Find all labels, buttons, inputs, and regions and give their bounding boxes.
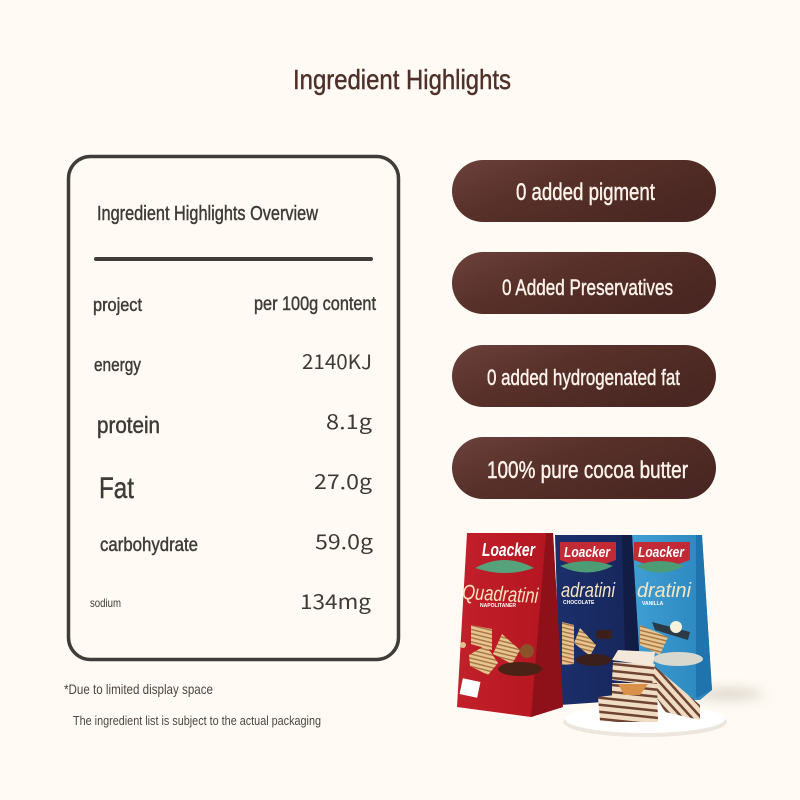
badge: 0 added pigment bbox=[452, 160, 716, 222]
bag: chocolate: Loacker bbox=[564, 544, 611, 561]
bag: chocolate: adratini bbox=[561, 580, 615, 602]
bag: vanilla: dratini bbox=[637, 580, 692, 602]
footnote: The ingredient list is subject to the actual packaging bbox=[73, 714, 321, 728]
bag: napolitaner bbox=[457, 533, 563, 717]
row: carbohydrate: carbohydrate bbox=[100, 534, 198, 556]
bag: napolitaner: Quadratini bbox=[462, 581, 540, 608]
header row bbox=[93, 294, 377, 315]
row: protein: protein bbox=[97, 412, 160, 438]
row: sodium: sodium bbox=[90, 596, 121, 610]
plate with wafers bbox=[563, 650, 727, 737]
badge: 100% pure cocoa butter: 100% pure cocoa butter bbox=[487, 457, 688, 484]
badge: 0 added preservatives bbox=[452, 252, 716, 314]
badge: 0 added hydrogenated fat bbox=[452, 345, 716, 407]
row: carbohydrate: 59.0g bbox=[315, 526, 373, 555]
row: fat: 27.0g bbox=[314, 466, 372, 495]
row: sodium bbox=[90, 586, 371, 615]
badge: 100% pure cocoa butter bbox=[452, 437, 716, 499]
bag: chocolate: CHOCOLATE bbox=[563, 600, 595, 606]
row: fat: Fat bbox=[99, 472, 135, 505]
row: energy bbox=[94, 346, 372, 375]
table heading: Ingredient Highlights Overview bbox=[97, 203, 318, 225]
bag: chocolate bbox=[555, 535, 639, 705]
badge: 0 added hydrogenated fat: 0 added hydrogenated fat bbox=[487, 365, 680, 390]
row: protein: 8.1g bbox=[326, 406, 372, 435]
badge: 0 added pigment: 0 added pigment bbox=[516, 179, 655, 206]
badge: 0 added preservatives: 0 Added Preservatives bbox=[502, 275, 673, 300]
row: energy: 2140KJ bbox=[302, 346, 372, 375]
product image bbox=[457, 533, 764, 737]
row: fat bbox=[99, 466, 372, 505]
bag: vanilla: Loacker bbox=[638, 544, 685, 561]
bag: napolitaner: Loacker bbox=[482, 540, 536, 560]
footnote bbox=[64, 681, 321, 728]
row: protein bbox=[97, 406, 372, 438]
header row: project bbox=[93, 294, 142, 315]
bag: vanilla bbox=[632, 535, 712, 700]
bag: vanilla: VANILLA bbox=[642, 601, 664, 607]
title: Ingredient Highlights bbox=[293, 64, 511, 95]
bag: napolitaner: NAPOLITANER bbox=[480, 603, 516, 609]
shadow bbox=[692, 689, 764, 699]
row: energy: energy bbox=[94, 355, 141, 375]
row: sodium: 134mg bbox=[300, 586, 371, 615]
row: carbohydrate bbox=[100, 526, 373, 556]
panel: nutrition table bbox=[68, 156, 398, 660]
header row: per 100g content bbox=[254, 294, 377, 315]
footnote: *Due to limited display space bbox=[64, 681, 213, 697]
